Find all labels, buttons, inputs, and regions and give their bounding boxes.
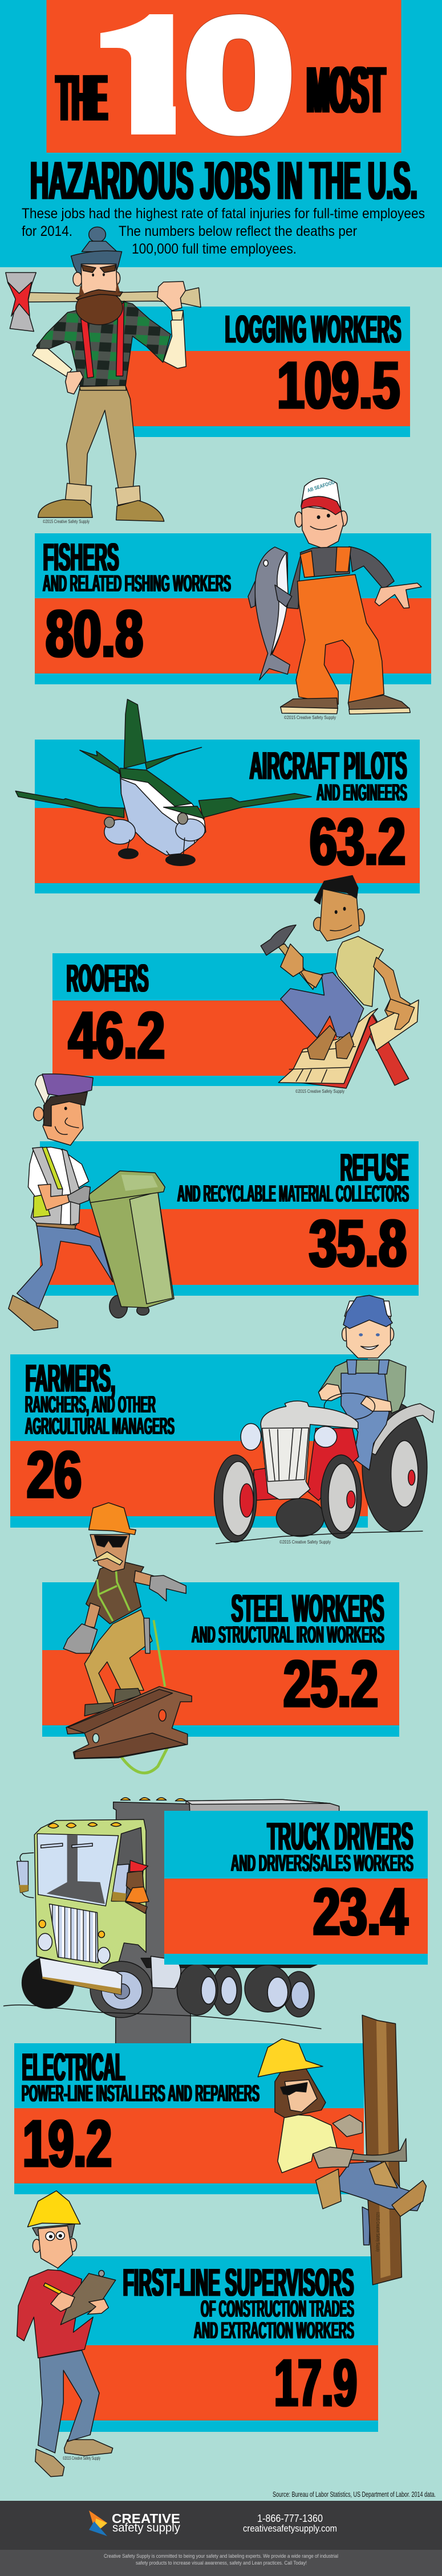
illustration: supervisor <box>17 2191 116 2477</box>
arm and gloves <box>38 1184 90 1210</box>
panel: farmers: 26 <box>27 1438 82 1512</box>
rear tire <box>362 1403 434 1532</box>
roofer body <box>281 936 419 1060</box>
illustration: supervisor: ©2015 Creative Safety Supply <box>63 2456 100 2461</box>
panel: roofers: 46.2 <box>68 998 165 1072</box>
panel: farmers: FARMERS, <box>26 1357 115 1400</box>
tail <box>80 699 201 774</box>
panel: farmers: AGRICULTURAL MANAGERS <box>25 1412 175 1439</box>
illustration: logger: ©2015 Creative Safety Supply <box>43 519 90 524</box>
overalls <box>296 547 384 704</box>
pole <box>362 2015 402 2285</box>
landing gear <box>119 838 195 866</box>
panel: refuse collectors: 35.8 <box>309 1206 407 1280</box>
illustration: steel worker <box>63 1503 192 1773</box>
intro text: for 2014. <box>22 223 72 239</box>
head and cap <box>295 478 347 549</box>
front tires <box>214 1455 362 1542</box>
worker head <box>89 1503 136 1571</box>
panel: aircraft pilots <box>35 740 420 893</box>
i-beam <box>66 1687 192 1759</box>
contact details: 1-866-777-1360 <box>257 2513 323 2524</box>
illustration: logger <box>6 227 201 524</box>
fuselage <box>120 768 206 855</box>
illustration: power-line installer <box>258 2015 426 2285</box>
axe <box>6 272 201 332</box>
arms <box>33 281 186 394</box>
company statement: safety products to increase visual awareness, safety and Lean practices. Call Today! <box>136 2560 307 2566</box>
farmer <box>319 1360 406 1470</box>
fish <box>248 547 292 680</box>
head and helmet <box>27 2191 80 2268</box>
illustration: roofer <box>261 876 419 1094</box>
shirt and vest <box>28 1147 89 1226</box>
hammer and arm <box>261 925 323 990</box>
clipboard and hands <box>44 2271 116 2325</box>
pants and shoes <box>35 2350 113 2477</box>
belt and legs <box>9 1223 113 1330</box>
lineman head <box>258 2039 326 2118</box>
torso plaid shirt <box>37 301 171 390</box>
panel: fishers: 80.8 <box>46 597 143 671</box>
panel: farmers <box>10 1354 368 1528</box>
panel: fishers: FISHERS <box>43 536 119 579</box>
company statement <box>104 2553 338 2566</box>
illustration: roofer: ©2015 Creative Safety Supply <box>295 1089 344 1094</box>
worker torso <box>63 1561 186 1654</box>
cap and head <box>34 1074 93 1145</box>
illustration: farmer on tractor <box>214 1295 434 1545</box>
beam loop strap <box>121 1620 169 1773</box>
roofer head <box>314 876 364 941</box>
engines <box>104 813 205 844</box>
panel: aircraft pilots: 63.2 <box>310 805 405 879</box>
contact details: creativesafetysupply.com <box>243 2523 337 2534</box>
red shirt <box>17 2269 93 2358</box>
illustration: power-line installer: ©2015 Creative Safety Supply <box>375 2212 380 2252</box>
wings <box>15 791 311 819</box>
panel: roofers: ROOFERS <box>67 957 148 1000</box>
contact details <box>243 2513 337 2534</box>
front tire <box>39 1958 152 2018</box>
panel: steel workers: 25.2 <box>283 1647 378 1721</box>
head <box>71 227 123 325</box>
jeans behind pole <box>362 2207 370 2245</box>
illustration: airplane <box>15 699 311 866</box>
title <box>31 14 417 199</box>
panel: steel workers <box>42 1582 399 1737</box>
illustration: farmer on tractor: ©2015 Creative Safety Supply <box>279 1540 331 1545</box>
panel: logging workers <box>123 307 410 437</box>
illustration: fisher: ©2015 Creative Safety Supply <box>284 715 336 720</box>
legs and boots <box>38 386 164 521</box>
panel: logging workers: 109.5 <box>277 348 400 422</box>
brand name: safety supply <box>112 2521 180 2534</box>
farmer head <box>342 1295 394 1358</box>
panel: refuse collectors <box>40 1141 419 1296</box>
intro text: 100,000 full time employees. <box>132 241 297 257</box>
roof <box>278 1009 409 1088</box>
brand name <box>112 2511 180 2534</box>
illustration: refuse collector <box>9 1074 174 1330</box>
mirrors <box>17 1853 129 1901</box>
intro text <box>22 206 425 257</box>
panel: electrical installers: ELECTRICAL <box>22 2046 125 2089</box>
arms <box>287 546 421 609</box>
title: THE <box>56 62 107 134</box>
bin <box>89 1171 174 1318</box>
worker legs <box>84 1610 152 1716</box>
panel: fishers <box>35 533 431 684</box>
panel: electrical installers: 19.2 <box>23 2106 112 2181</box>
panel: fishers: AND RELATED FISHING WORKERS <box>43 570 231 597</box>
panel: roofers <box>52 953 336 1086</box>
footer <box>0 2501 442 2576</box>
illustration: fisher <box>248 478 421 720</box>
panel: first-line supervisors: 17.9 <box>274 2346 357 2420</box>
icon: creative safety supply logo <box>89 2510 107 2536</box>
panel: truck drivers <box>164 1811 428 1965</box>
center tire <box>276 1499 324 1537</box>
intro text: The numbers below reflect the deaths per <box>119 223 357 239</box>
tractor body <box>241 1401 359 1500</box>
brand name: CREATIVE <box>112 2511 180 2526</box>
illustration: fisher: AB SEAFOOD <box>307 479 336 493</box>
lineman arms and shirt <box>278 2114 426 2216</box>
panel: electrical installers <box>14 2043 364 2194</box>
driver <box>125 1860 149 1913</box>
boots <box>281 695 410 714</box>
illustration: truck <box>3 1798 339 2047</box>
panel: farmers: RANCHERS, AND OTHER <box>25 1391 156 1418</box>
company statement: Creative Safety Supply is committed to being your safety and labeling experts. We provide a wide range of industrial <box>104 2553 338 2559</box>
header band <box>0 0 442 267</box>
cab <box>34 1819 146 1973</box>
panel: truck drivers: 23.4 <box>313 1875 408 1949</box>
panel: first-line supervisors <box>57 2256 378 2432</box>
rear tires <box>151 1956 314 2017</box>
